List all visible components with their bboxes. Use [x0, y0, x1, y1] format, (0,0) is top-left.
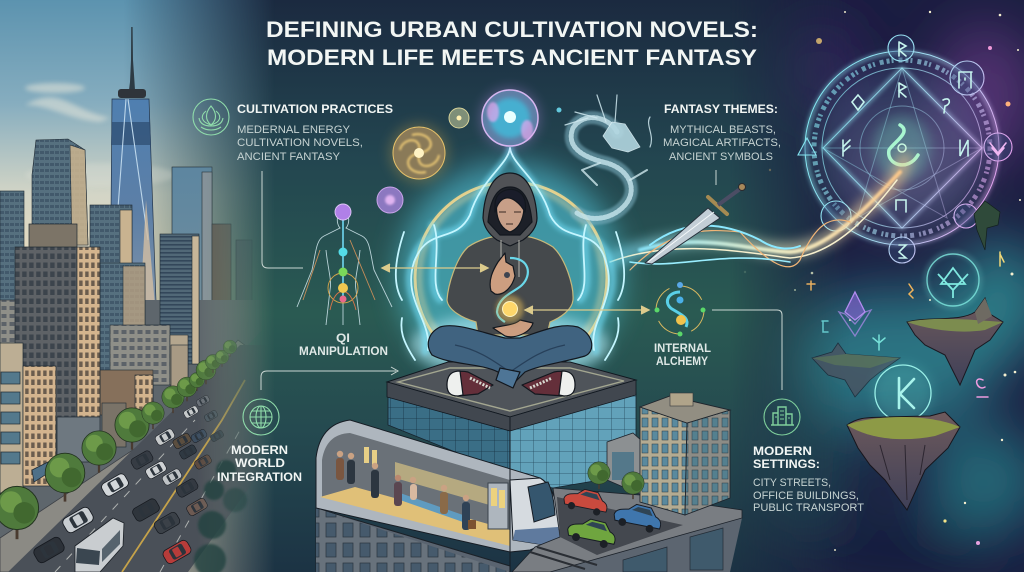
nebula clouds	[740, 20, 1024, 572]
title: DEFINING URBAN CULTIVATION NOVELS:	[266, 17, 758, 42]
subway train cutaway	[316, 417, 560, 572]
big foreground tower	[15, 224, 100, 462]
panel: central cultivator scene	[193, 17, 864, 572]
island right	[907, 298, 1003, 385]
callout: cultivation practices	[237, 102, 393, 163]
callout: modern settings	[753, 444, 864, 514]
callout: modern settings: SETTINGS:	[753, 457, 820, 471]
far skyline	[0, 138, 252, 300]
leader: modern settings	[712, 310, 782, 390]
floating islands and rune orbs	[807, 201, 1004, 510]
callout: cultivation practices: CULTIVATION NOVELS,	[237, 137, 363, 149]
glowing flame sigil	[874, 116, 930, 180]
platform floor	[320, 487, 510, 546]
sky	[0, 0, 275, 572]
dantian orb	[496, 295, 524, 323]
lower building	[316, 508, 510, 572]
callout: modern world integration: WORLD	[235, 456, 285, 470]
arrow: modern world	[261, 367, 398, 390]
icon: city buildings	[764, 399, 800, 435]
callout: qi manipulation: QI	[336, 331, 350, 345]
hands	[490, 253, 533, 337]
purple orb	[480, 88, 540, 148]
roof deck	[387, 362, 636, 417]
callout: internal alchemy	[654, 341, 711, 368]
train front	[488, 478, 560, 545]
small glowing runes	[807, 252, 1004, 397]
small orbs	[377, 108, 562, 213]
callout: cultivation practices: ANCIENT FANTASY	[237, 151, 341, 163]
icon: magic rune circle	[798, 35, 1012, 263]
callout: modern world integration: MODERN	[231, 443, 288, 457]
arrow: internal alchemy	[525, 306, 649, 314]
office roof	[387, 362, 636, 488]
apartment building	[640, 407, 687, 515]
island bottom	[847, 412, 960, 510]
hoodie	[447, 236, 573, 335]
purple crystal	[839, 292, 871, 336]
gold swirl orb	[389, 123, 449, 183]
train interior	[322, 433, 510, 540]
callout: qi manipulation: MANIPULATION	[299, 344, 388, 358]
arrow: fantasy themes	[715, 170, 717, 185]
jeans	[428, 326, 592, 388]
passengers	[336, 451, 476, 530]
callout: fantasy themes	[663, 102, 781, 163]
icon: globe	[243, 399, 279, 435]
rune orb upper	[926, 253, 980, 307]
spire tower	[110, 27, 156, 300]
street trees	[588, 462, 644, 499]
bus	[75, 518, 124, 572]
callout: modern world integration: INTEGRATION	[217, 470, 302, 484]
callout: modern world integration	[217, 443, 302, 484]
rune orb K	[873, 363, 933, 423]
connector lines and arrows	[261, 170, 782, 390]
train shell	[316, 420, 560, 552]
dim island centre	[812, 343, 900, 397]
callout: modern settings: OFFICE BUILDINGS,	[753, 490, 859, 502]
leader: cultivation practices	[262, 171, 303, 268]
small dark island	[974, 201, 1000, 250]
callout: modern settings: PUBLIC TRANSPORT	[753, 502, 864, 514]
face	[495, 189, 526, 232]
callout: cultivation practices: CULTIVATION PRACTICES	[237, 102, 393, 116]
cultivator figure	[428, 173, 592, 396]
near left buildings	[0, 343, 56, 493]
energy orbs	[377, 88, 562, 213]
space background	[746, 0, 1024, 572]
hood	[483, 173, 537, 246]
mid blocks	[0, 205, 199, 447]
ground filler behind blocks	[0, 300, 262, 545]
callout: fantasy themes: FANTASY THEMES:	[664, 102, 778, 116]
interior windows and seats	[364, 447, 500, 508]
sidewalk	[0, 340, 246, 572]
lower front building	[550, 518, 742, 572]
callout: qi manipulation	[299, 331, 388, 358]
building glass left face	[388, 395, 510, 474]
callout: cultivation practices: MEDERNAL ENERGY	[237, 124, 351, 136]
drawstrings	[501, 240, 519, 277]
building glass right face	[510, 393, 636, 488]
clouds	[25, 83, 175, 187]
arrow: qi manipulation	[382, 264, 488, 272]
panel: cosmic fantasy realm	[744, 0, 1024, 572]
small grey building	[607, 433, 642, 495]
stars	[744, 11, 1021, 551]
dark roadside shrubs	[194, 460, 247, 572]
icon: lotus	[193, 99, 229, 135]
energy swirl on chest	[497, 258, 528, 322]
street with traffic	[8, 345, 266, 572]
slab surface	[512, 488, 742, 572]
title: MODERN LIFE MEETS ANCIENT FANTASY	[267, 45, 757, 70]
callout: fantasy themes: MAGICAL ARTIFACTS,	[663, 137, 781, 149]
icon: spirit dragon	[565, 95, 651, 218]
street level corner	[512, 393, 742, 572]
icon: large runes	[843, 42, 1006, 258]
aura glow	[398, 163, 622, 387]
callout: fantasy themes: ANCIENT SYMBOLS	[669, 151, 773, 163]
icon: ancient sword	[645, 184, 746, 264]
callout: fantasy themes: MYTHICAL BEASTS,	[670, 124, 776, 136]
sneakers	[447, 371, 575, 396]
panel: modern city skyline	[0, 27, 266, 572]
callout: internal alchemy: ALCHEMY	[656, 354, 708, 368]
callout: modern settings: CITY STREETS,	[753, 477, 831, 489]
callout: modern settings: MODERN	[753, 444, 812, 458]
road surface	[557, 497, 683, 555]
street trees	[0, 340, 237, 539]
callout: internal alchemy: INTERNAL	[654, 341, 711, 355]
flowing energy stream	[610, 160, 905, 270]
icon: qi body diagram	[297, 204, 392, 325]
title	[266, 17, 758, 70]
icon: internal alchemy yin yang	[654, 282, 706, 336]
energy flames	[396, 148, 624, 360]
street cars	[562, 485, 664, 550]
